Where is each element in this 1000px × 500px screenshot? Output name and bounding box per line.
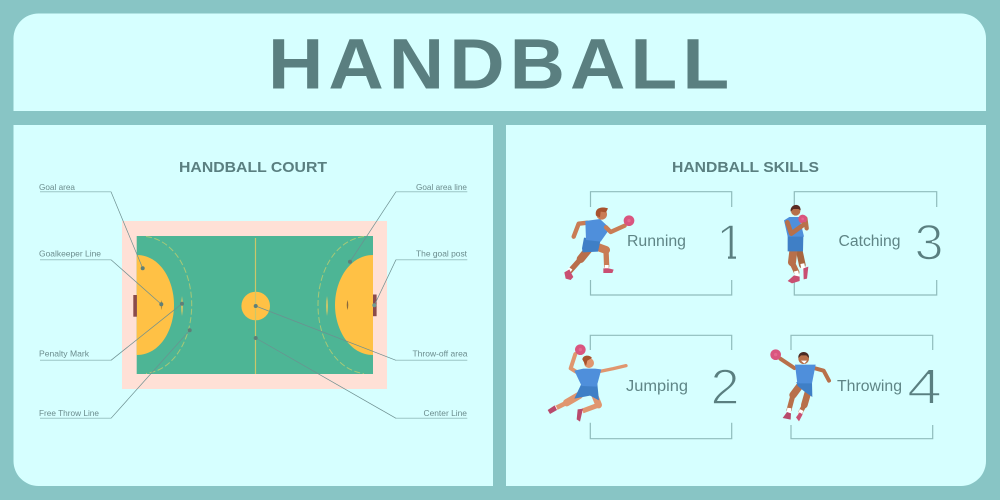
heading: handball court: HANDBALL COURT bbox=[179, 159, 327, 176]
goal post: right bbox=[373, 294, 377, 316]
label: throw-off area bbox=[254, 304, 468, 360]
icon: runner bbox=[564, 208, 634, 280]
icon: catcher bbox=[784, 205, 808, 283]
label: penalty mark: Penalty Mark bbox=[39, 350, 90, 358]
skill card: throwing: 4 bbox=[907, 359, 942, 415]
label: goal area line: Goal area line bbox=[416, 183, 467, 192]
label: goal area: Goal area bbox=[39, 183, 75, 192]
court diagram bbox=[122, 221, 387, 389]
label: throw-off area: Throw-off area bbox=[412, 350, 468, 358]
label: penalty mark bbox=[39, 302, 184, 360]
label: goal area bbox=[39, 183, 145, 270]
skill card: catching: 3 bbox=[914, 214, 944, 270]
title: HANDBALL bbox=[268, 24, 729, 104]
heading: handball skills: HANDBALL SKILLS bbox=[672, 159, 819, 176]
icon: thrower bbox=[770, 349, 829, 421]
skill card: jumping bbox=[548, 335, 740, 439]
label: goalkeeper line bbox=[39, 250, 163, 306]
skill card: catching bbox=[784, 192, 944, 295]
skill card: jumping: Jumping bbox=[626, 378, 688, 395]
skill card: throwing: Throwing bbox=[837, 378, 902, 395]
label: the goal post: The goal post bbox=[416, 250, 468, 258]
skill card: running: Running bbox=[627, 233, 686, 250]
label: center line bbox=[254, 336, 467, 418]
label: the goal post bbox=[372, 250, 468, 307]
panel: handball court bbox=[14, 125, 493, 486]
skill card: catching: Catching bbox=[838, 233, 900, 250]
skill card: jumping: 2 bbox=[710, 359, 740, 415]
label: free throw line: Free Throw Line bbox=[39, 409, 99, 418]
skill card: running bbox=[564, 192, 744, 295]
label: free throw line bbox=[39, 328, 192, 418]
icon: jumper bbox=[548, 344, 626, 422]
skill card: throwing bbox=[770, 335, 942, 439]
goal post: left bbox=[133, 295, 137, 317]
label: center line: Center Line bbox=[424, 409, 467, 418]
panel: title banner bbox=[14, 14, 986, 111]
label: goal area line bbox=[348, 183, 467, 264]
panel: handball skills bbox=[506, 125, 986, 486]
skill card: running: 1 bbox=[716, 214, 744, 270]
label: goalkeeper line: Goalkeeper Line bbox=[39, 250, 101, 258]
